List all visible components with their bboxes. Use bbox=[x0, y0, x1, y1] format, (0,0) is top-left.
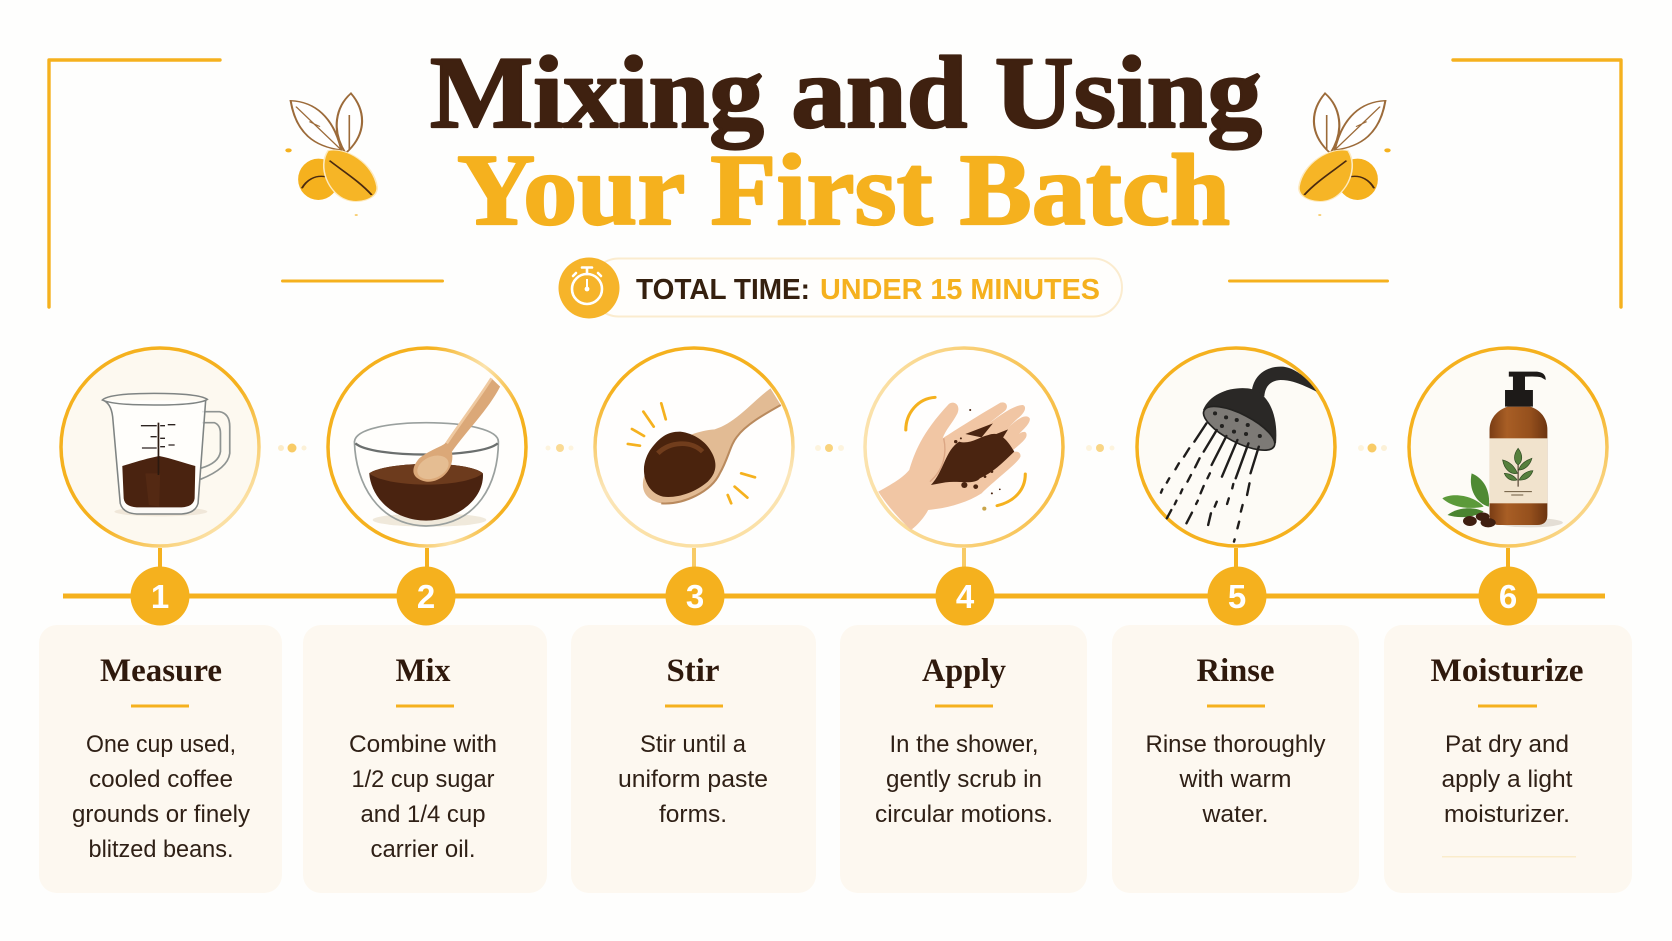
badge 3 bbox=[666, 566, 724, 626]
card 3 body: Stir until a bbox=[640, 731, 746, 758]
card 6 heading: Moisturize bbox=[1430, 653, 1584, 689]
icon: measuring cup bbox=[102, 393, 230, 516]
card 2 body: 1/2 cup sugar bbox=[352, 766, 494, 793]
card 1 body bbox=[72, 731, 251, 863]
badge 5 bbox=[1208, 566, 1266, 626]
card 6 body bbox=[1442, 731, 1573, 828]
step 3 image circle: coffee paste on spoon bbox=[595, 348, 793, 572]
icon: stopwatch bbox=[558, 258, 620, 318]
card 1 body: One cup used, bbox=[86, 731, 236, 758]
card 3 heading: Stir bbox=[666, 653, 720, 689]
title bbox=[430, 36, 1262, 247]
card 5 body: Rinse thoroughly bbox=[1146, 731, 1326, 758]
card 3: Stir bbox=[571, 625, 816, 893]
card 4 body: circular motions. bbox=[875, 801, 1053, 828]
total time pill bbox=[558, 258, 1122, 318]
timeline line bbox=[63, 594, 1605, 598]
divider right bbox=[1228, 280, 1389, 282]
card 6: Moisturize bbox=[1384, 625, 1632, 893]
icon: open hand with grounds bbox=[878, 397, 1030, 530]
badge 3: 3 bbox=[686, 578, 704, 615]
step 1 image circle: measuring cup bbox=[61, 348, 259, 572]
corner frame right bbox=[1453, 60, 1621, 307]
number badges bbox=[130, 566, 1538, 626]
title line 2: Your First Batch bbox=[457, 134, 1230, 247]
card 1 body: blitzed beans. bbox=[88, 836, 234, 863]
card 4: Apply bbox=[840, 625, 1087, 893]
badge 1 bbox=[130, 566, 190, 626]
card 5 body bbox=[1146, 731, 1326, 828]
badge 2: 2 bbox=[417, 578, 435, 615]
icon: shower head with water bbox=[1161, 367, 1317, 542]
badge 5: 5 bbox=[1228, 578, 1246, 615]
badge 2 bbox=[396, 566, 456, 626]
step 4 image circle: scrub in hand bbox=[865, 348, 1063, 572]
card 6 body: moisturizer. bbox=[1444, 801, 1570, 828]
icon: coffee beans and leaves left bbox=[285, 93, 377, 216]
time label: TOTAL TIME: bbox=[636, 274, 810, 306]
card 4 body bbox=[875, 731, 1053, 828]
card 4 body: gently scrub in bbox=[886, 766, 1042, 793]
badge 1: 1 bbox=[151, 578, 169, 615]
card 2 body: carrier oil. bbox=[370, 836, 476, 863]
card 4 heading: Apply bbox=[922, 653, 1006, 689]
badge 4: 4 bbox=[956, 578, 975, 615]
connector dots bbox=[278, 444, 1387, 452]
card 3 body: uniform paste bbox=[618, 766, 768, 793]
card 6 body: apply a light bbox=[1442, 766, 1573, 793]
card 6 body: Pat dry and bbox=[1445, 731, 1569, 758]
time value: UNDER 15 MINUTES bbox=[820, 274, 1100, 306]
icon: coffee beans and leaves right bbox=[1299, 93, 1391, 216]
step 5 image circle: shower head bbox=[1137, 348, 1335, 572]
card 2 body: Combine with bbox=[349, 731, 497, 758]
badge 4 bbox=[936, 566, 994, 626]
card 1 body: cooled coffee bbox=[89, 766, 233, 793]
card 3 body: forms. bbox=[659, 801, 727, 828]
card 1 heading: Measure bbox=[100, 653, 222, 689]
card 1 body: grounds or finely bbox=[72, 801, 251, 828]
badge 6: 6 bbox=[1499, 578, 1517, 615]
card 5 body: water. bbox=[1201, 801, 1268, 828]
card 2 heading: Mix bbox=[396, 653, 451, 689]
card 5: Rinse bbox=[1112, 625, 1359, 893]
icon: wooden spoon with paste bbox=[628, 388, 781, 503]
badge 6 bbox=[1478, 566, 1538, 626]
card 2 body: and 1/4 cup bbox=[360, 801, 486, 828]
card 1: Measure bbox=[39, 625, 282, 893]
card 3 body bbox=[618, 731, 768, 828]
corner frame left bbox=[49, 60, 220, 307]
step 2 image circle: mixing bowl bbox=[328, 348, 526, 572]
title line 1: Mixing and Using bbox=[430, 36, 1262, 150]
step 6 image circle: moisturizer bottle bbox=[1409, 348, 1607, 572]
icon: glass bowl with spoon bbox=[354, 378, 500, 527]
card 4 body: In the shower, bbox=[890, 731, 1038, 758]
divider left bbox=[281, 280, 444, 282]
card 5 body: with warm bbox=[1178, 766, 1292, 793]
card 5 heading: Rinse bbox=[1196, 653, 1274, 689]
icon: amber pump bottle with leaves and beans bbox=[1442, 372, 1563, 527]
card 2 body bbox=[349, 731, 497, 863]
card 2: Mix bbox=[303, 625, 547, 893]
